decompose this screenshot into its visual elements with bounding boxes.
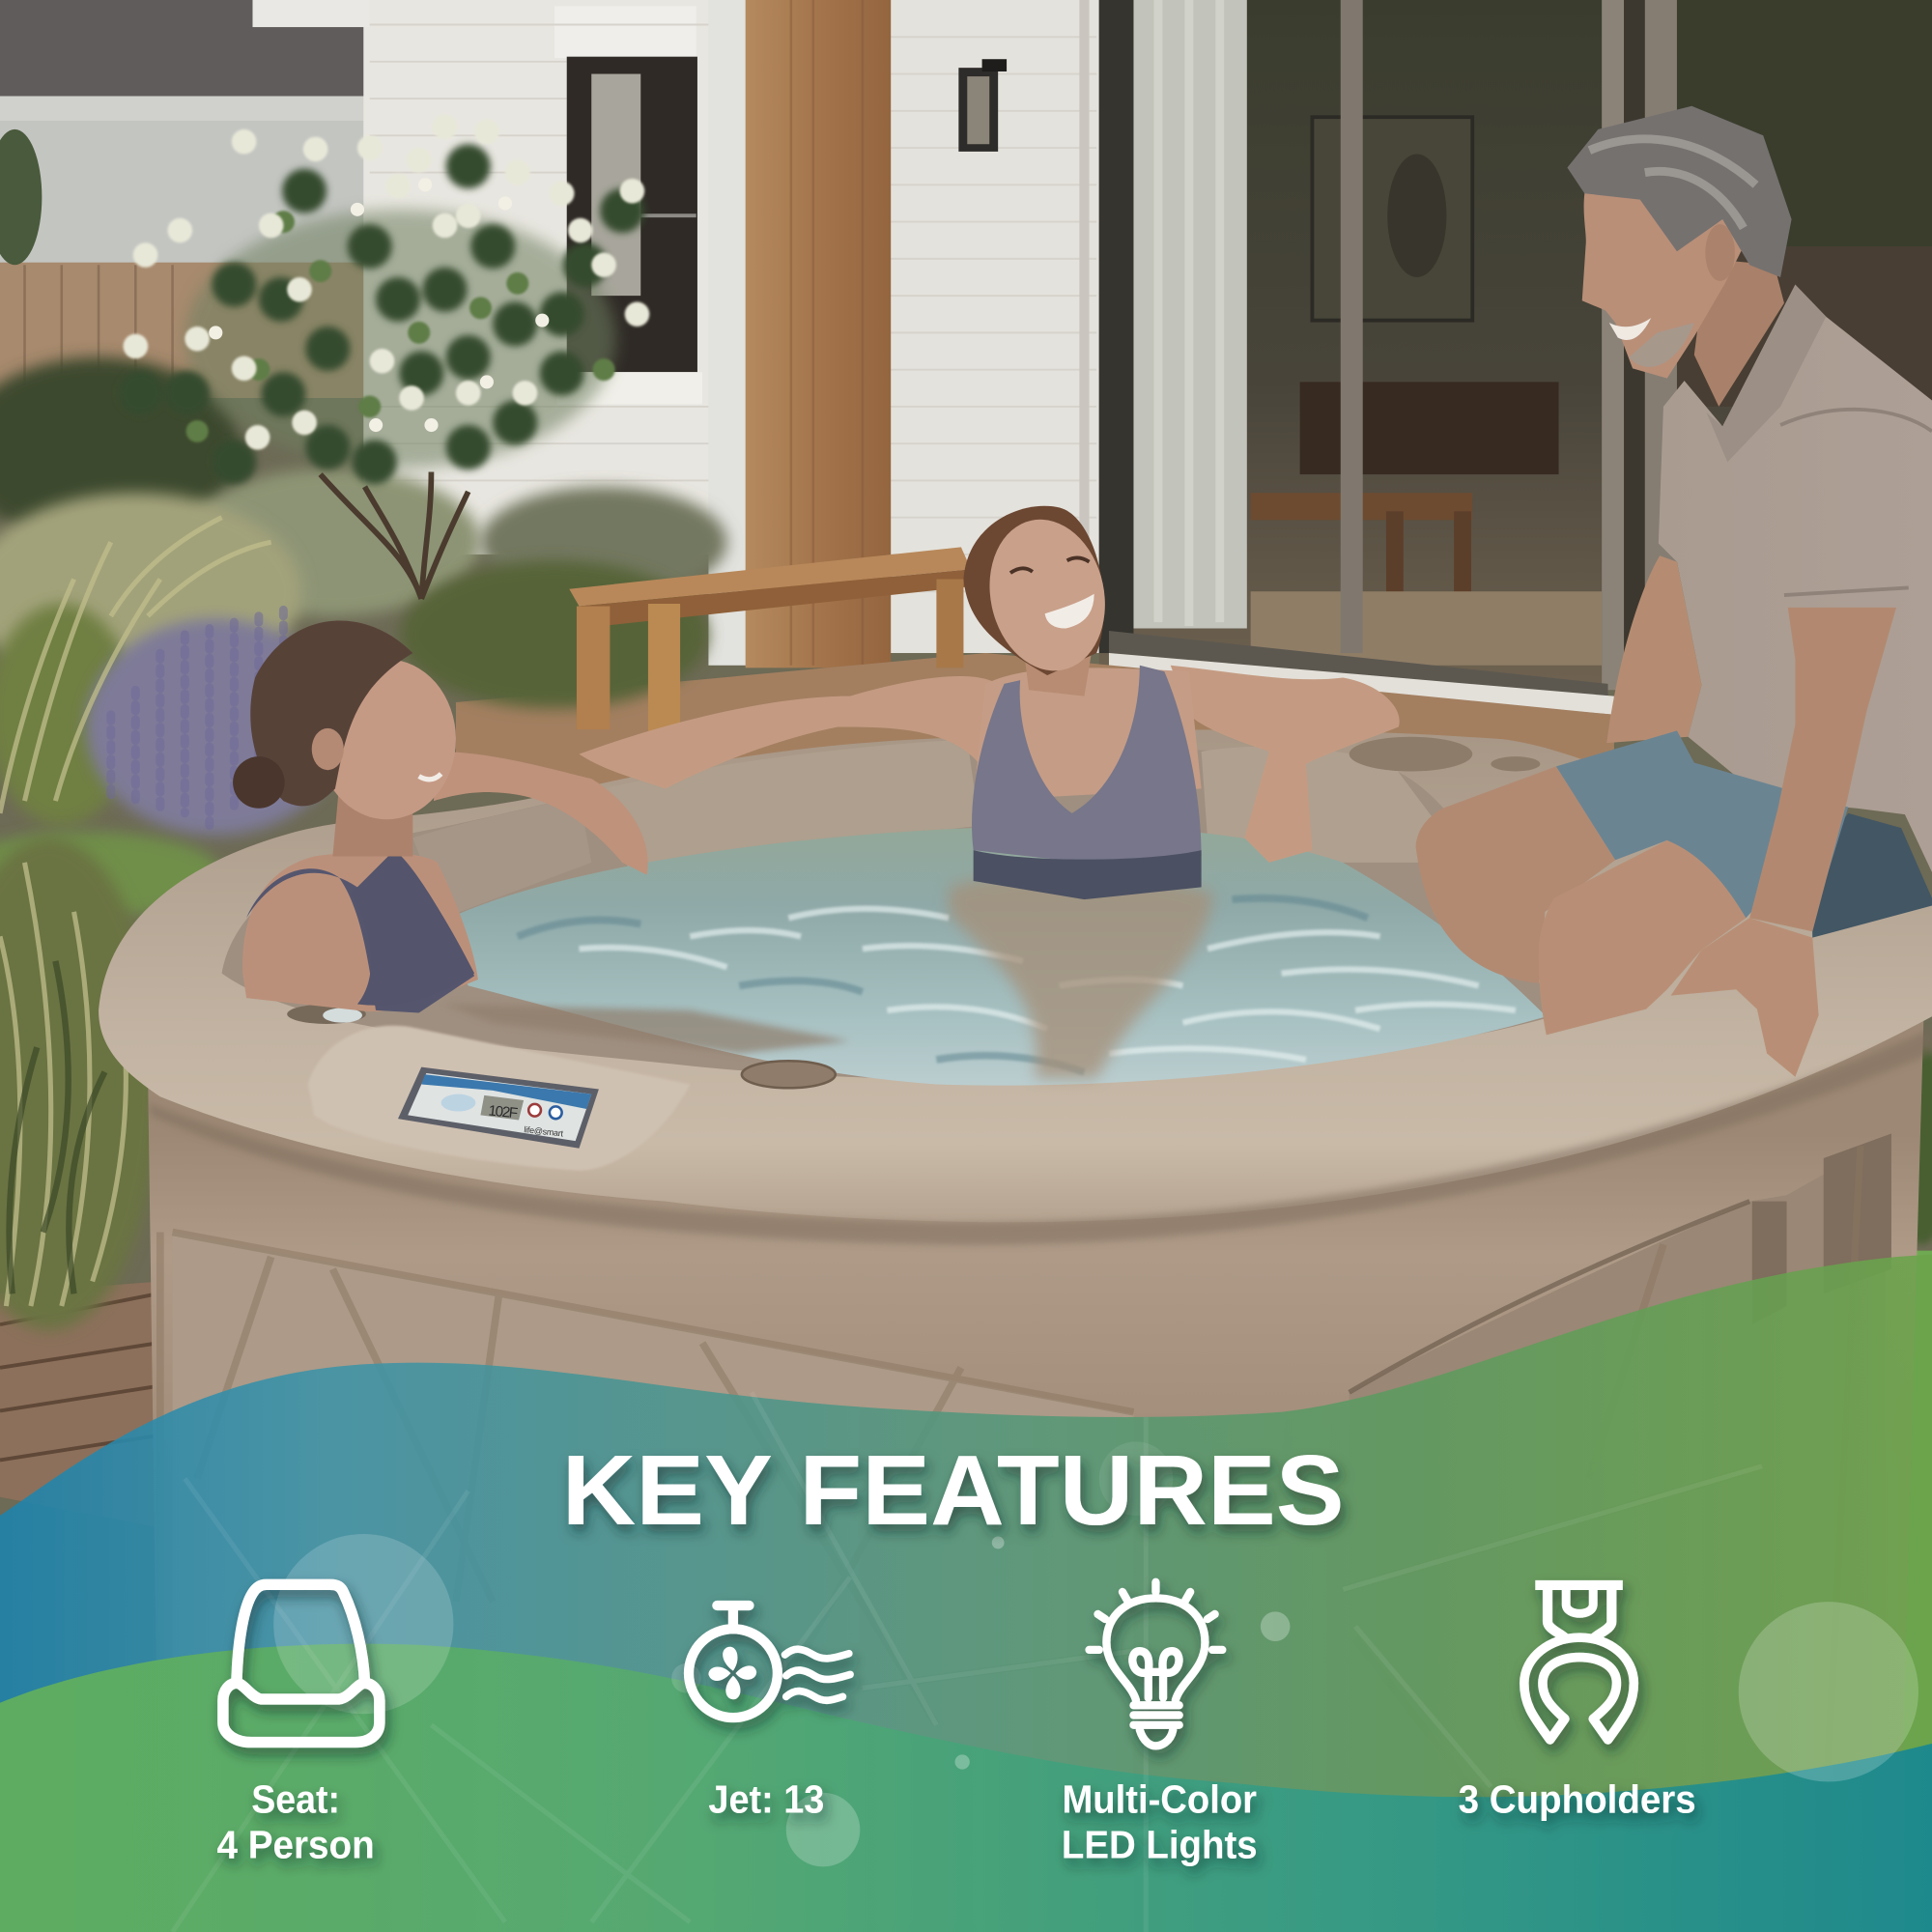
- label: cupholders: 3 Cupholders: [1459, 1776, 1696, 1821]
- neck: [1694, 259, 1784, 407]
- tub rim: [99, 729, 1932, 1222]
- jets on rim: [287, 1005, 366, 1024]
- tub body: [148, 985, 1924, 1932]
- label: seat: [216, 1776, 375, 1866]
- console bump: [308, 1026, 690, 1171]
- white brick wall: [252, 0, 1101, 653]
- water: [450, 826, 1547, 1086]
- far thigh and shin: [1416, 766, 1615, 983]
- feature: led lights: [1062, 1582, 1258, 1866]
- feature: seat: [216, 1584, 380, 1866]
- label: seat: 4 Person: [216, 1822, 375, 1866]
- control panel: [398, 1067, 599, 1149]
- icon: seat: [223, 1584, 380, 1743]
- right arm: [1749, 608, 1896, 931]
- icon: cupholder: [1524, 1585, 1634, 1740]
- white trim and wood pillar: [708, 0, 891, 668]
- face: [1582, 173, 1749, 379]
- shorts: [1556, 730, 1848, 918]
- hair: [1567, 106, 1792, 277]
- cup holder: [742, 1061, 836, 1088]
- left arm: [1606, 555, 1701, 743]
- neighbouring house: [0, 0, 370, 398]
- icon: light bulb: [1090, 1582, 1222, 1746]
- submerged legs of woman: [949, 871, 1213, 1078]
- icon: jet pump: [689, 1605, 850, 1718]
- title: KEY FEATURES: [562, 1434, 1345, 1546]
- person: man on the right: [1416, 106, 1932, 1077]
- submerged legs of girl: [443, 1005, 850, 1054]
- tub side panels: [160, 1133, 1891, 1932]
- window: [557, 57, 702, 404]
- water caustics: [579, 909, 1516, 1060]
- foreground green-to-teal wave: [0, 1644, 1932, 1932]
- label: seat: Seat:: [251, 1776, 340, 1821]
- hot tub: [99, 729, 1932, 1932]
- label: jets: Jet: 13: [708, 1776, 824, 1821]
- shirt: [1659, 285, 1932, 872]
- label: led lights: LED Lights: [1062, 1822, 1258, 1866]
- collar and sleeve seams: [1707, 285, 1826, 462]
- foreground blue-to-green wave: [0, 1254, 1932, 1932]
- bokeh circles: [273, 1441, 1918, 1866]
- hand on rim: [1671, 918, 1819, 1077]
- deck: [0, 653, 1932, 1932]
- feature: cupholders: [1459, 1585, 1696, 1821]
- garden shrubs: [0, 357, 1932, 1331]
- control panel: life@smart: [524, 1124, 564, 1139]
- faint tub pattern through waves: [173, 1392, 1762, 1932]
- near thigh and shin: [1539, 840, 1746, 1035]
- inner wall: [222, 747, 1552, 1079]
- rim front shadow: [148, 1029, 1932, 1245]
- flowering tree: [135, 127, 638, 599]
- label: led lights: [1062, 1776, 1258, 1866]
- wooden bench: [569, 547, 971, 732]
- dark rear shorts: [1811, 813, 1932, 938]
- control panel: 102F: [488, 1102, 519, 1122]
- person: girl on the left: [233, 621, 648, 1012]
- sliding glass door: [1099, 0, 1932, 715]
- person: woman in the centre: [579, 506, 1400, 899]
- label: led lights: Multi-Color: [1062, 1776, 1257, 1821]
- feature: jets: [689, 1605, 850, 1821]
- wall lamp: [958, 59, 1007, 152]
